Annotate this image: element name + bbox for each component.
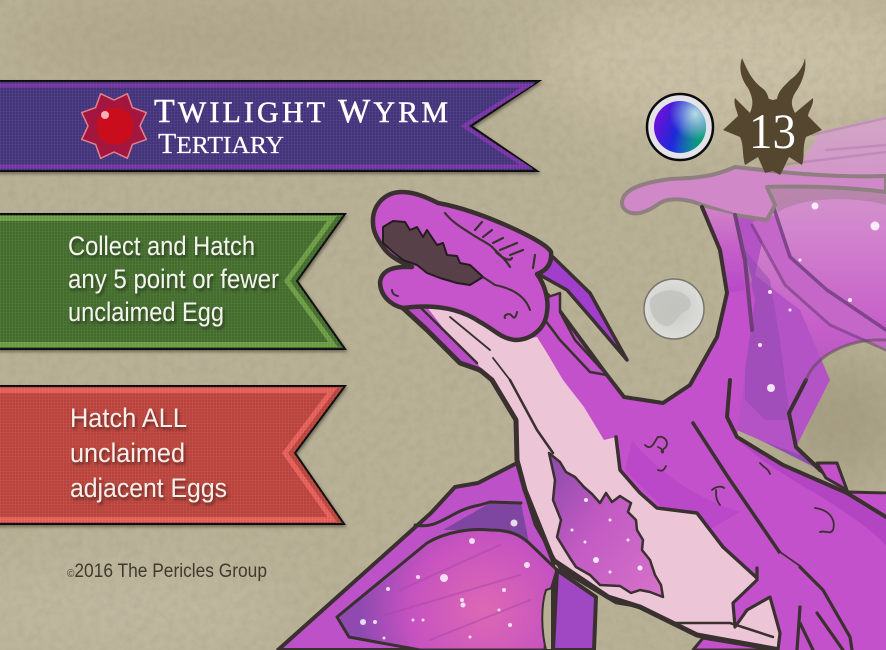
subtitle text: TERTIARY	[158, 129, 284, 160]
icon: red gem	[82, 94, 146, 158]
banner: green ability	[0, 214, 345, 349]
banner: red ability	[0, 386, 345, 524]
jaw line	[392, 277, 530, 318]
eye and brow	[445, 213, 535, 268]
body fill	[403, 207, 886, 650]
bottom purple patch	[693, 638, 765, 650]
pink belly	[420, 294, 780, 650]
point badge	[723, 58, 822, 175]
rear leg	[553, 570, 596, 650]
mouth	[383, 221, 483, 285]
green ribbon text	[68, 231, 279, 327]
banner: title ribbon	[0, 81, 539, 171]
neck spine	[545, 293, 607, 375]
red ribbon text	[70, 403, 227, 503]
title text: TWILIGHT WYRM	[154, 93, 448, 130]
foreleg and claws	[733, 553, 852, 650]
wing arm	[622, 167, 886, 220]
dragon illustration	[278, 116, 886, 650]
horn	[540, 257, 627, 360]
icon: moon	[644, 279, 704, 339]
red ribbon text: Hatch ALL	[70, 403, 187, 433]
red ribbon text: unclaimed	[70, 438, 185, 468]
green ribbon text: unclaimed Egg	[68, 297, 224, 327]
red ribbon text: adjacent Eggs	[70, 473, 227, 503]
green ribbon text: any 5 point or fewer	[68, 264, 279, 294]
point value: 13	[749, 103, 796, 159]
icon: colour disc	[647, 94, 713, 160]
green ribbon text: Collect and Hatch	[68, 231, 255, 261]
upper wing	[735, 116, 886, 487]
head	[373, 192, 551, 340]
chest galaxy patch	[549, 453, 663, 597]
lower left wing	[278, 463, 557, 650]
scale marks	[645, 437, 834, 532]
copyright: ©2016 The Pericles Group	[67, 561, 267, 582]
